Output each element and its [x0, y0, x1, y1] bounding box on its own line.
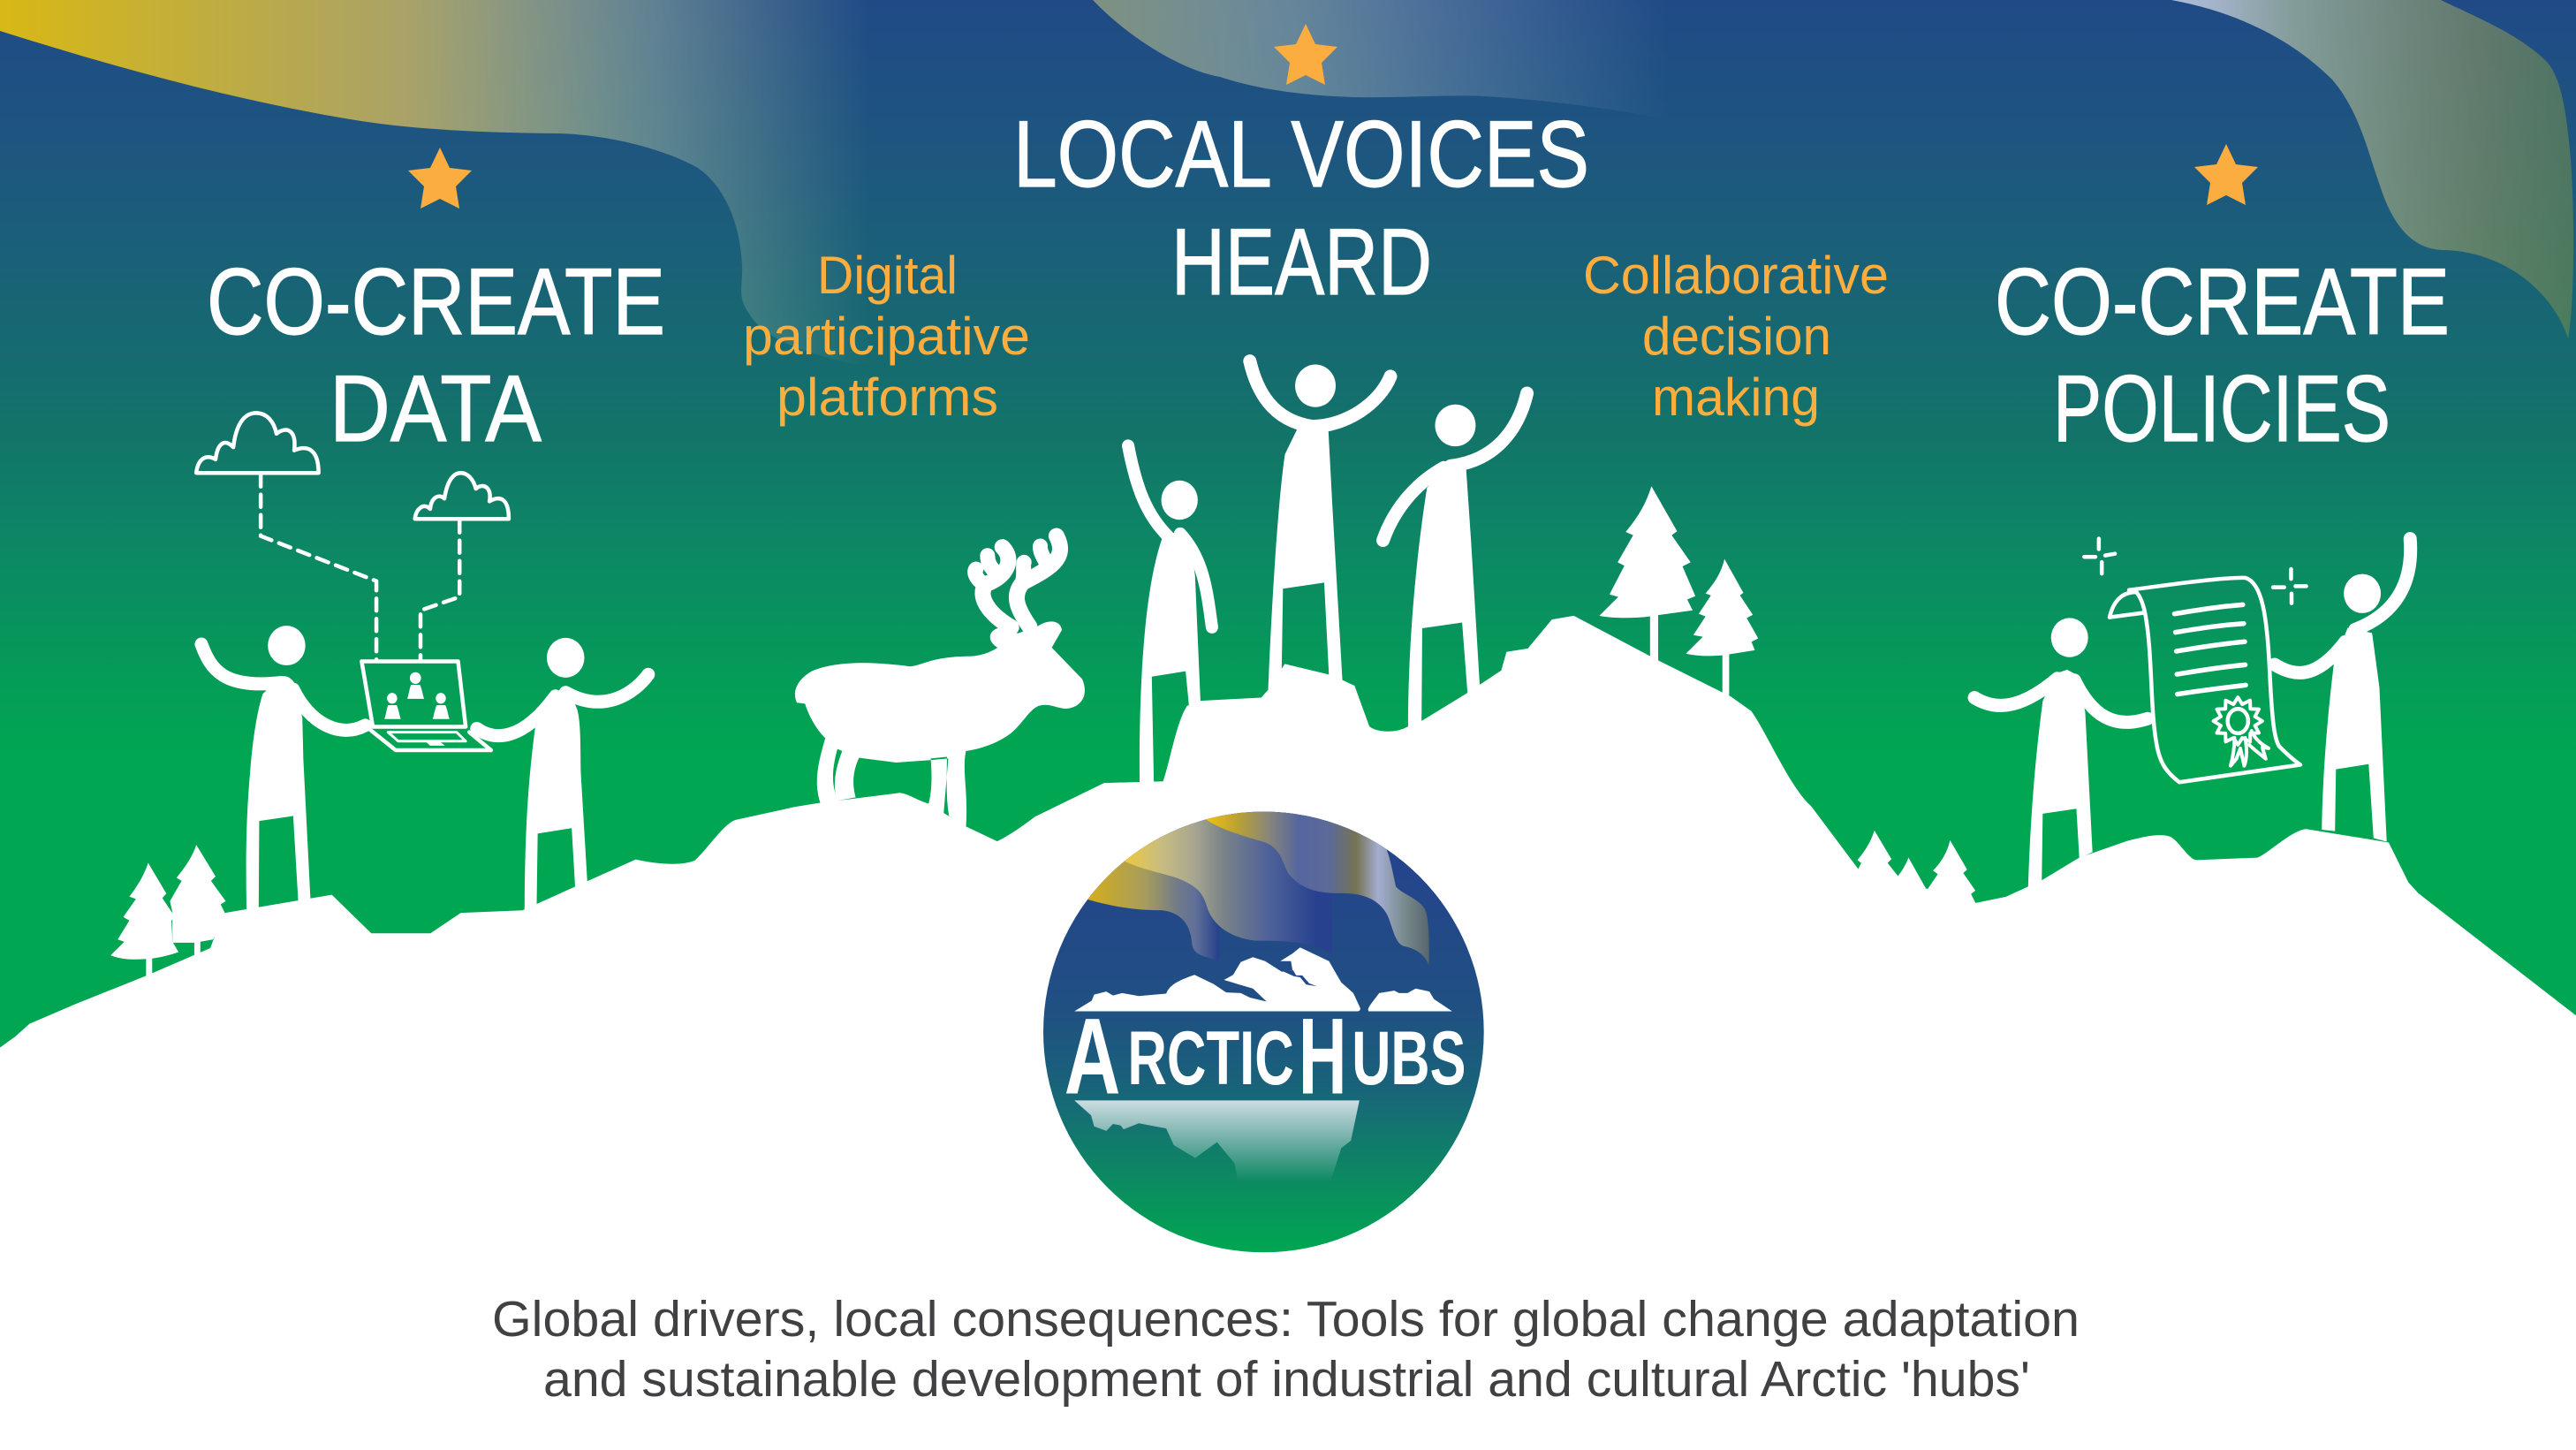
heading: local voices heard	[1013, 101, 1589, 315]
text: collaborative decision making: Collaborative	[1583, 246, 1889, 305]
logo wordmark: RCTIC	[1127, 1016, 1294, 1101]
text: collaborative decision making: decision	[1642, 307, 1831, 366]
person holding scroll left	[1974, 618, 2148, 889]
icon: reindeer	[795, 536, 1085, 828]
project description: and sustainable development of industrial and cultural Arctic 'hubs'	[543, 1351, 2030, 1408]
person: hill left	[1128, 445, 1212, 784]
aurora band right	[2171, 0, 2573, 338]
icon: laptop	[361, 661, 491, 750]
project description	[492, 1291, 2080, 1408]
heading: co-create data	[207, 248, 665, 461]
reindeer and crowd illustration	[795, 361, 1758, 828]
dashed link from small cloud	[420, 520, 459, 661]
heading: local voices heard: HEARD	[1171, 209, 1432, 315]
heading: co-create policies: POLICIES	[2053, 355, 2390, 461]
logo wordmark: H	[1299, 996, 1346, 1117]
tree large	[1599, 486, 1695, 660]
logo wordmark: UBS	[1352, 1016, 1466, 1101]
icon: large cloud	[196, 413, 319, 473]
icon: sparkle right	[2273, 569, 2307, 604]
person: summit centre	[1250, 361, 1390, 691]
person right with laptop	[477, 638, 648, 912]
ArcticHubs logo	[1043, 795, 1484, 1252]
logo mountains	[1074, 947, 1452, 1012]
person holding scroll right	[2275, 539, 2411, 841]
trees left	[110, 845, 226, 978]
heading: co-create policies	[1995, 248, 2450, 461]
heading: co-create data: CO-CREATE	[207, 248, 665, 354]
text: digital participative platforms	[743, 246, 1030, 427]
trees right	[1857, 831, 1977, 938]
project description: Global drivers, local consequences: Tools for global change adaptation	[492, 1291, 2080, 1348]
aurora band centre	[1093, 0, 1678, 121]
logo aurora	[1087, 795, 1429, 966]
logo disc	[1043, 812, 1484, 1252]
logo wordmark: A	[1064, 996, 1120, 1117]
policy illustration	[1857, 539, 2411, 938]
text: collaborative decision making: making	[1652, 368, 1820, 427]
star right	[2194, 144, 2258, 205]
star left	[408, 148, 472, 209]
aurora band left	[0, 0, 883, 367]
icon: rosette seal	[2214, 697, 2269, 766]
star centre	[1274, 24, 1337, 85]
icon: sparkle left	[2084, 539, 2115, 573]
heading: co-create data: DATA	[330, 355, 542, 461]
text: digital participative platforms: platforms	[777, 368, 998, 427]
text: collaborative decision making	[1583, 246, 1889, 427]
heading: local voices heard: LOCAL VOICES	[1013, 101, 1589, 207]
heading: co-create policies: CO-CREATE	[1995, 248, 2450, 354]
tree small	[1686, 559, 1758, 697]
icon: small cloud	[415, 473, 509, 519]
text: digital participative platforms: Digital	[817, 246, 958, 305]
cloud data illustration	[110, 413, 648, 978]
icon: scroll document	[2110, 578, 2300, 782]
logo reflection	[1074, 1100, 1360, 1181]
text: digital participative platforms: participative	[743, 307, 1030, 366]
white snowy hills	[0, 616, 2576, 1450]
person: right waving	[1383, 393, 1527, 729]
person left with laptop	[201, 626, 365, 910]
dashed link from large cloud	[261, 474, 376, 661]
